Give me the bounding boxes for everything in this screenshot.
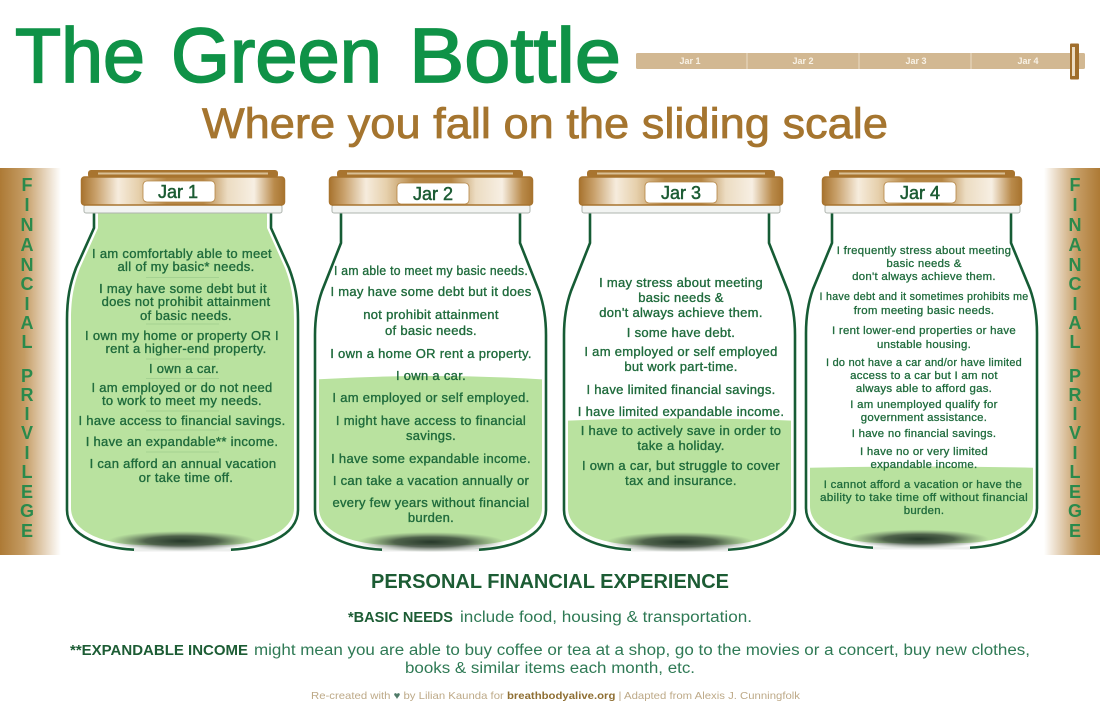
panel: jar 3	[557, 170, 802, 552]
left side bar: financial privilege: P	[21, 366, 33, 386]
jar 2 statements: I have some expandable income.	[331, 451, 531, 466]
jar 1 lid: Jar 1	[158, 182, 198, 202]
slider scale: Jar 2	[792, 56, 814, 66]
left side bar: financial privilege: A	[20, 313, 34, 333]
left side bar: financial privilege: E	[21, 521, 33, 541]
jar 3 shadow	[606, 532, 754, 552]
jar 1 lid	[82, 170, 284, 213]
jar 3 statements: I am employed or self employed	[584, 344, 778, 359]
jar 3 statements: take a holiday.	[637, 438, 725, 453]
jar 2 liquid	[319, 376, 542, 545]
subtitle: Where you fall on the sliding scale	[202, 100, 888, 148]
footnote: expandable income	[70, 642, 1030, 677]
jar 3 statements: I have to actively save in order to	[581, 423, 781, 438]
jar 4 statements: burden.	[904, 505, 944, 517]
slider scale: Jar 3	[905, 56, 927, 66]
left side bar: financial privilege: N	[20, 255, 34, 275]
left side bar: financial privilege: R	[20, 385, 34, 405]
title: The	[15, 13, 145, 99]
jar 1 statements: I can afford an annual vacation	[90, 456, 276, 471]
footnote: basic needs	[348, 609, 752, 626]
right side bar: financial privilege: A	[1068, 235, 1082, 255]
right side bar: financial privilege: N	[1068, 255, 1082, 275]
right side bar: financial privilege: L	[1070, 332, 1080, 352]
jar 1 statements: I own my home or property OR I	[85, 328, 279, 343]
right side bar: financial privilege: R	[1068, 385, 1082, 405]
jar 3 lid: Jar 3	[661, 183, 701, 203]
jar 4 liquid	[810, 466, 1033, 543]
jar 4 statements: basic needs &	[886, 258, 962, 270]
jar 3 statements: tax and insurance.	[625, 473, 737, 488]
left side bar: financial privilege: I	[24, 404, 30, 424]
left side bar: financial privilege: C	[20, 274, 34, 294]
right side bar: financial privilege: A	[1068, 313, 1082, 333]
left side bar: financial privilege: F	[22, 175, 32, 195]
jar 1 statements: I own a car.	[149, 361, 219, 376]
jar 2 statements	[330, 263, 532, 525]
jar 4 statements: expandable income.	[870, 459, 978, 471]
left side bar: financial privilege: I	[24, 195, 30, 215]
title: Bottle	[409, 13, 621, 99]
footnote: basic needs: *BASIC NEEDS	[348, 609, 453, 626]
footnote: expandable income: books & similar items each month, etc.	[405, 660, 695, 677]
jar 3 glass outline	[564, 213, 795, 550]
footnote: basic needs: include food, housing & transportation.	[460, 609, 752, 626]
right side bar: financial privilege: V	[1069, 423, 1081, 443]
jar 4 statements: I have no financial savings.	[852, 428, 996, 440]
jar 4 statements: unstable housing.	[877, 339, 971, 351]
slider scale: Jar 1	[679, 56, 701, 66]
footer credit: Re-created with ♥ by Lilian Kaunda for breathbodyalive.org | Adapted from Alexis J. Cunningfolk	[311, 690, 801, 702]
slider handle	[1070, 44, 1079, 80]
right side bar: financial privilege: C	[1068, 274, 1082, 294]
jar 1 statements: does not prohibit attainment	[102, 294, 271, 309]
jar 2 statements: I am able to meet my basic needs.	[334, 263, 528, 278]
jar 2 statements: I may have some debt but it does	[330, 284, 532, 299]
jar 4 statements: I am unemployed qualify for	[850, 399, 998, 411]
jar 1 statements: I am comfortably able to meet	[92, 246, 272, 261]
right side bar: financial privilege: I	[1072, 404, 1078, 424]
right side bar: financial privilege: P	[1069, 366, 1081, 386]
jar 2 lid: Jar 2	[413, 184, 453, 204]
right side bar: financial privilege: N	[1068, 215, 1082, 235]
right side bar: financial privilege: E	[1069, 482, 1081, 502]
jar 1 statements: to work to meet my needs.	[102, 393, 262, 408]
jar 1 glass outline	[67, 213, 298, 550]
right side bar: financial privilege: I	[1072, 294, 1078, 314]
left side bar: financial privilege: A	[20, 235, 34, 255]
jar 4 shadow	[849, 530, 989, 548]
right side bar: financial privilege: F	[1070, 175, 1080, 195]
right side bar: financial privilege: L	[1070, 462, 1080, 482]
jar 2 statements: of basic needs.	[385, 323, 477, 338]
jar 1 statements: all of my basic* needs.	[118, 259, 254, 274]
panel: jar 1	[60, 170, 305, 552]
jar 2 statements: I am employed or self employed.	[332, 390, 530, 405]
title: Green	[171, 13, 382, 99]
left side bar: financial privilege: I	[24, 294, 30, 314]
jar 1 statements: I have access to financial savings.	[78, 413, 286, 428]
right side bar: financial privilege: I	[1072, 443, 1078, 463]
jar 2 shadow	[357, 532, 505, 552]
jar 2 glass outline	[315, 213, 546, 550]
jar 3 statements: I own a car, but struggle to cover	[582, 458, 780, 473]
jar 4 statements: I have no or very limited	[860, 446, 988, 458]
jar 4 statements: I frequently stress about meeting	[837, 245, 1011, 257]
jar 1 statements: I have an expandable** income.	[86, 434, 278, 449]
jar 1 statements: of basic needs.	[140, 308, 232, 323]
jar 1 statements	[78, 246, 286, 485]
jar 4 statements: access to a car but I am not	[850, 370, 998, 382]
jar 4 glass outline	[806, 213, 1037, 548]
jar 3 statements: but work part-time.	[624, 359, 738, 374]
right side bar: financial privilege: I	[1072, 195, 1078, 215]
jar 2 statements: I can take a vacation annually or	[333, 473, 530, 488]
jar 2 statements: not prohibit attainment	[363, 307, 499, 322]
left side bar: financial privilege: V	[21, 423, 33, 443]
right side bar: financial privilege: E	[1069, 521, 1081, 541]
jar 3 statements: I may stress about meeting	[599, 275, 763, 290]
left side bar: financial privilege: E	[21, 482, 33, 502]
heading: personal financial experience: PERSONAL FINANCIAL EXPERIENCE	[371, 571, 729, 593]
jar 4 statements: ability to take time off without financial	[820, 492, 1028, 504]
jar 4 statements: I do not have a car and/or have limited	[826, 357, 1022, 369]
slider scale	[636, 44, 1085, 80]
jar 1 liquid	[71, 214, 294, 545]
jar 1 shadow	[108, 531, 256, 551]
jar 4 statements: I cannot afford a vacation or have the	[824, 479, 1022, 491]
right side bar: financial privilege	[1044, 168, 1100, 555]
jar 1 statements: I may have some debt but it	[99, 281, 267, 296]
jar 4 lid	[822, 170, 1022, 213]
jar 2 lid	[330, 170, 532, 213]
left side bar: financial privilege: L	[22, 462, 32, 482]
jar 1 statements: rent a higher-end property.	[105, 341, 267, 356]
footnote: expandable income: might mean you are able to buy coffee or tea at a shop, go to the movies or a concert, buy new clothes,	[254, 642, 1030, 659]
jar 2 statements: I might have access to financial	[336, 413, 526, 428]
left side bar: financial privilege: I	[24, 443, 30, 463]
jar 3 statements: I have limited financial savings.	[586, 382, 776, 397]
jar 3 statements	[578, 275, 784, 488]
panel: jar 2	[308, 170, 553, 552]
jar 2 statements: I own a home OR rent a property.	[330, 346, 532, 361]
footnote: expandable income: **EXPANDABLE INCOME	[70, 642, 248, 659]
jar 4 statements: I have debt and it sometimes prohibits me	[820, 291, 1028, 303]
jar 3 statements: don't always achieve them.	[599, 305, 763, 320]
jar 4 statements: government assistance.	[861, 412, 987, 424]
jar 3 statements: I have limited expandable income.	[578, 404, 784, 419]
panel: jar 4	[799, 170, 1044, 550]
jar 3 lid	[580, 170, 782, 213]
jar 3 statements: basic needs &	[638, 290, 724, 305]
jar 4 statements	[820, 245, 1028, 517]
jar 1 statements: or take time off.	[139, 470, 233, 485]
jar 4 statements: I rent lower-end properties or have	[832, 325, 1016, 337]
left side bar: financial privilege	[0, 168, 61, 555]
jar 3 statements: I some have debt.	[627, 325, 735, 340]
jar 2 statements: every few years without financial	[332, 495, 530, 510]
jar 4 statements: always able to afford gas.	[856, 383, 992, 395]
jar 2 statements: I own a car.	[396, 368, 466, 383]
jar 4 lid: Jar 4	[900, 183, 940, 203]
jar 2 statements: burden.	[408, 510, 454, 525]
title	[15, 13, 621, 99]
left side bar: financial privilege: G	[20, 501, 34, 521]
jar 4 statements: don't always achieve them.	[852, 271, 996, 283]
left side bar: financial privilege: L	[22, 332, 32, 352]
jar 4 statements: from meeting basic needs.	[854, 305, 994, 317]
jar 2 statements: savings.	[406, 428, 456, 443]
right side bar: financial privilege: G	[1068, 501, 1082, 521]
slider scale: Jar 4	[1017, 56, 1039, 66]
jar 1 statements: I am employed or do not need	[91, 380, 273, 395]
jar 3 liquid	[568, 418, 791, 545]
left side bar: financial privilege: N	[20, 215, 34, 235]
